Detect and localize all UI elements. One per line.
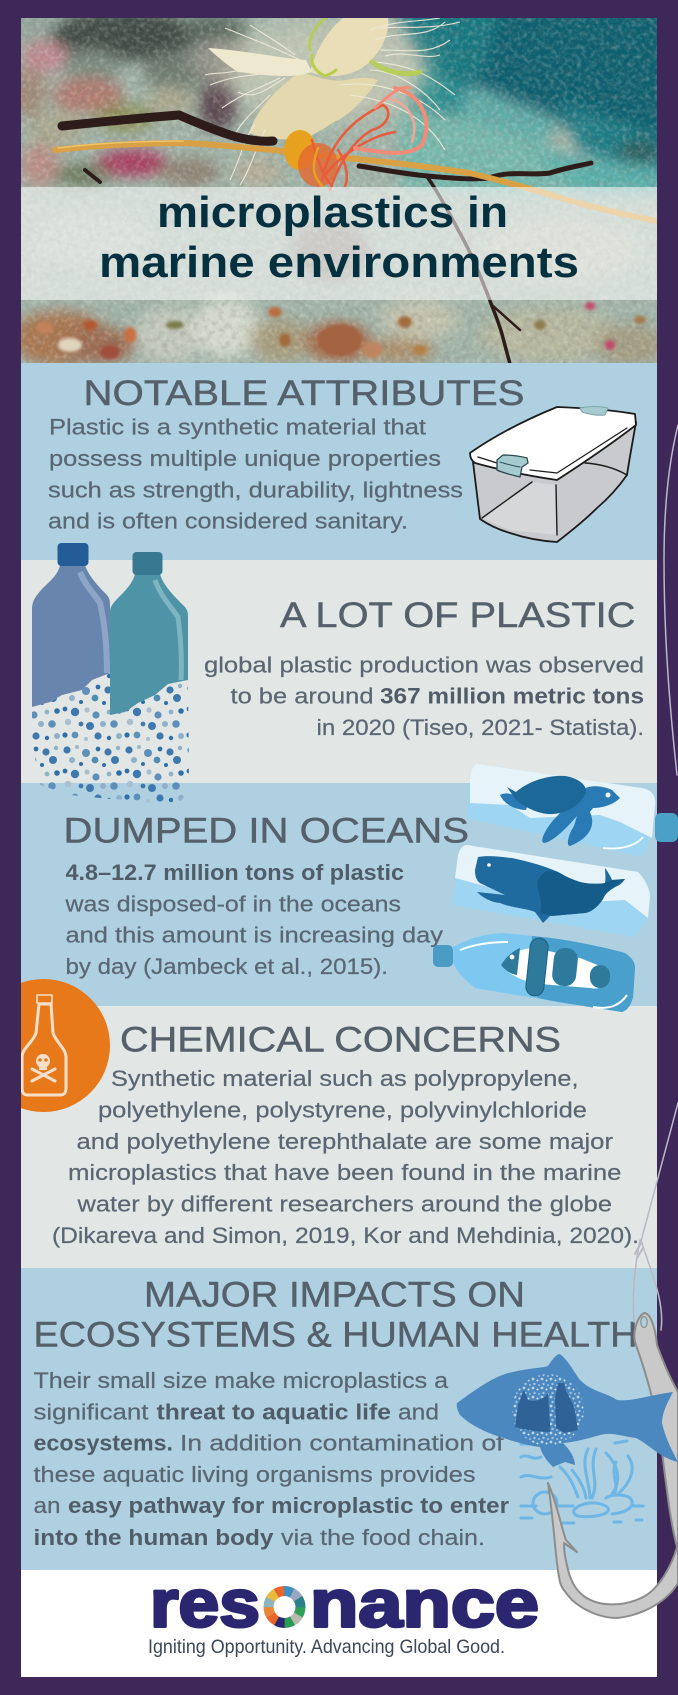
text: a lot of plastic body [204,652,644,740]
yellow plastic rope [55,141,657,221]
title banner [21,187,657,300]
turtle flippers [500,786,620,846]
text: major impacts body: threat to aquatic life [156,1400,391,1424]
microplastic particles [32,673,189,810]
illustration: plastic bottles breaking into particles [32,543,189,810]
text: dumped in oceans body: was disposed-of in the oceans [64,892,401,916]
logo: resonance wordmark: res [150,1566,260,1642]
text: notable attributes body: Plastic is a synthetic material that [49,414,427,440]
heading: chemical concerns: CHEMICAL CONCERNS [120,1020,561,1060]
turtle shell [507,776,586,814]
text: notable attributes body: possess multiple unique properties [49,446,441,471]
logo ring [268,1591,300,1623]
panel: notable attributes [21,363,657,560]
text: chemical concerns body: polyethylene, polystyrene, polyvinylchloride [98,1098,587,1122]
green ties [310,18,420,76]
heading: dumped in oceans: DUMPED IN OCEANS [64,812,469,850]
text: a lot of plastic body: in 2020 (Tiseo, 2021- Statista). [316,715,644,740]
illustration: fish with plastics inside [457,1354,678,1467]
illustration: whale trapped in bottle [453,845,650,937]
rock pebbles [37,302,646,359]
title: microplastics in [157,188,508,237]
text: major impacts body: Their small size make microplastics a [34,1368,449,1393]
heading: notable attributes: NOTABLE ATTRIBUTES [84,374,524,413]
illustration: fishing hook [548,1313,678,1618]
panel: major impacts [21,1268,657,1570]
text: chemical concerns body: water by different researchers around the globe [76,1192,612,1216]
panel: logo footer [21,1570,657,1677]
icon: poison bottle in orange circle [21,979,110,1112]
text: chemical concerns body: and polyethylene terephthalate are some major [76,1129,614,1154]
text: dumped in oceans body: and this amount is increasing day [66,922,444,948]
text: a lot of plastic body: to be around [230,684,374,708]
skull and crossbones [32,1054,55,1081]
plastic bag in fish [515,1390,550,1432]
text: major impacts body: ecosystems. [34,1430,173,1456]
heading: major impacts [34,1276,638,1354]
text: major impacts body: these aquatic living organisms provides [34,1462,476,1487]
text: major impacts body [34,1368,509,1550]
text: dumped in oceans body [64,860,444,979]
illustration: seaweed and water lines [521,1441,643,1523]
heading: major impacts: ECOSYSTEMS & HUMAN HEALTH [34,1316,638,1354]
logo: resonance wordmark [150,1566,539,1642]
text: major impacts body: into the human body [34,1525,274,1550]
heading: major impacts: MAJOR IMPACTS ON [144,1276,525,1314]
plastic bottle in fish [555,1383,578,1433]
text: major impacts body: In addition contamination of [180,1430,504,1456]
heading: a lot of plastic: A LOT OF PLASTIC [280,596,636,635]
panel: a lot of plastic [21,560,657,783]
text: a lot of plastic body: global plastic production was observed [204,652,644,678]
text: notable attributes body [48,414,463,534]
orange plastic strands [284,87,426,190]
text: chemical concerns body: microplastics that have been found in the marine [68,1160,622,1185]
text: chemical concerns body: (Dikareva and Simon, 2019, Kor and Mehdinia, 2020). [52,1223,639,1248]
logo: resonance wordmark: nance [310,1566,539,1642]
text: notable attributes body: such as strength, durability, lightness [48,478,463,502]
hero photo: plastic net and rope on the sea floor [10,5,670,366]
rock speckle [21,18,657,363]
illustration: clownfish trapped in bottle [433,933,635,1012]
text: major impacts body: via the food chain. [281,1525,485,1550]
text: major impacts body: and [398,1400,439,1424]
text: notable attributes body: and is often considered sanitary. [48,508,408,534]
text: dumped in oceans body: 4.8–12.7 million tons of plastic [66,860,404,885]
tagline: Igniting Opportunity. Advancing Global Good. [148,1636,505,1658]
icon: plastic food container [470,406,636,542]
text: chemical concerns body [52,1066,639,1248]
blue bottle [32,543,110,707]
panel: dumped in oceans [21,783,657,1006]
panel: chemical concerns [21,1006,657,1268]
text: a lot of plastic body: 367 million metric tons [380,684,644,708]
title [99,188,579,287]
text: major impacts body: an [34,1493,60,1518]
text: major impacts body: easy pathway for microplastic to enter [68,1493,509,1518]
illustration: fishing line [633,425,678,1330]
text: dumped in oceans body: by day (Jambeck et al., 2015). [66,954,388,979]
title: marine environments [99,238,579,287]
text: chemical concerns body: Synthetic material such as polypropylene, [111,1066,578,1091]
text: major impacts body: significant [34,1400,149,1424]
dark branch [62,115,591,364]
illustration: turtle trapped in bottle [467,764,678,857]
plastic net bag [205,18,460,185]
teal bottle [110,552,188,715]
